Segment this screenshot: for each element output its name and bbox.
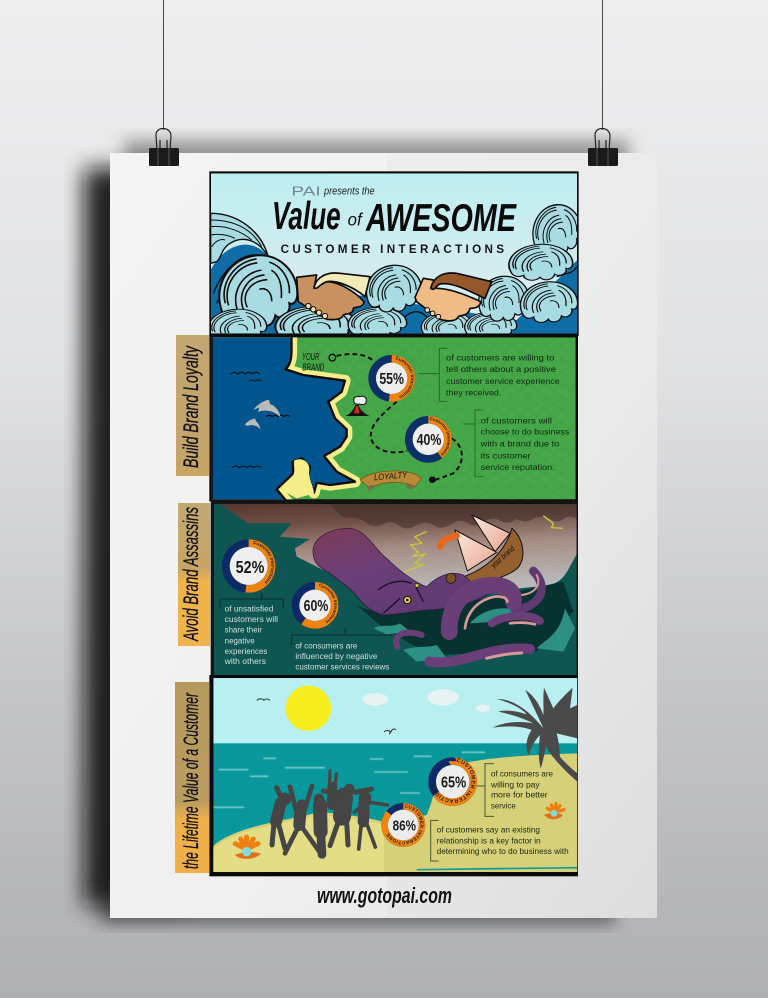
text: 40% stat: of customers will xyxy=(481,415,552,425)
label: your brand: BRAND xyxy=(302,363,324,374)
donut: 55%: Customer Interactions xyxy=(396,356,414,398)
text: 65% stat: service xyxy=(491,801,516,810)
icon: shell left xyxy=(235,837,261,859)
text: 52% stat: share their xyxy=(225,625,262,634)
text: 40% stat: with a brand due to xyxy=(480,438,560,448)
title: PAI presents the: presents the xyxy=(323,186,375,198)
poster drop shadow xyxy=(84,140,629,924)
palm tree xyxy=(493,688,577,782)
text: 52% stat: experiences xyxy=(225,647,267,656)
title: PAI presents the: PAI xyxy=(291,185,321,199)
text: 40% stat: its customer xyxy=(481,450,531,460)
donut: 40%: Customer Interactions xyxy=(430,417,450,456)
text: 55% stat: customer service experience xyxy=(446,376,560,386)
clouds xyxy=(362,689,490,712)
text: 52% stat: of unsatisfied xyxy=(225,604,273,613)
donut: 52%: Customer Interactions xyxy=(253,540,274,584)
donut: 55% xyxy=(368,355,415,402)
beach xyxy=(211,753,577,874)
footer url: www.gotopai.com xyxy=(317,883,452,908)
text: 60% stat xyxy=(292,628,392,672)
storm sky xyxy=(220,504,577,595)
people silhouettes xyxy=(272,771,387,854)
sea xyxy=(213,743,577,873)
text: 60% stat: influenced by negative xyxy=(295,652,378,661)
text: 55% stat: of customers are willing to xyxy=(446,352,555,362)
ribbon: Build Brand Loyalty: Build Brand Loyalty xyxy=(180,345,203,468)
birds xyxy=(257,699,396,734)
route: dashed path xyxy=(337,354,462,480)
text: 52% stat: customers will xyxy=(225,615,278,624)
waves: left group xyxy=(208,213,357,342)
text: 40% stat: service reputation. xyxy=(481,462,555,472)
donut: 40% xyxy=(405,416,452,463)
text: 86% stat: determining who to do business with xyxy=(437,847,569,856)
donut: 86%: 86% xyxy=(393,818,416,834)
sun xyxy=(286,686,331,731)
icon: handshake xyxy=(297,273,492,321)
donut: 65%: CUSTOMER INTERACTIONS xyxy=(430,758,476,804)
text: 40% stat: choose to do business xyxy=(481,427,570,437)
sky xyxy=(213,678,577,745)
poster sheet xyxy=(110,153,657,918)
title: Value of Awesome: AWESOME xyxy=(365,196,517,240)
ribbon: Avoid Brand Assassins: Avoid Brand Assassins xyxy=(180,507,203,642)
icon: route start and end xyxy=(329,354,436,483)
donut: 52%: 52% xyxy=(236,557,264,577)
dark waves xyxy=(357,582,575,662)
panel: avoid brand assassins xyxy=(210,500,578,675)
subtitle: CUSTOMER INTERACTIONS xyxy=(281,243,504,256)
text: 65% stat: of consumers are xyxy=(491,769,554,778)
text: 86% stat: of customers say an existing xyxy=(437,825,540,834)
text: 55% stat: they received. xyxy=(446,387,501,397)
boat: your brand xyxy=(489,544,517,570)
text: 86% stat: relationship is a key factor in xyxy=(437,836,541,845)
illustration: tentacles xyxy=(396,571,542,662)
donut: 65%: 65% xyxy=(441,775,466,792)
panel: lifetime value of a customer xyxy=(209,675,578,876)
banner: loyalty xyxy=(360,469,422,490)
icon: sea ripples xyxy=(231,372,290,468)
donut: 55%: 55% xyxy=(379,371,404,388)
map: sea and coastline xyxy=(212,333,355,503)
text: 86% stat xyxy=(431,820,569,861)
text: 55% stat xyxy=(418,348,560,401)
text: 60% stat: of consumers are xyxy=(295,642,358,651)
title: Value of Awesome: of xyxy=(348,209,364,229)
title: Value of Awesome: Value xyxy=(272,194,341,238)
label: your brand xyxy=(302,353,324,370)
panel: build brand loyalty xyxy=(209,335,578,502)
text: 52% stat: with others xyxy=(224,657,266,666)
label: your brand: YOUR xyxy=(302,352,319,363)
waves: centre group xyxy=(348,265,517,339)
text: 65% stat xyxy=(477,764,554,816)
donut: 60%: 60% xyxy=(304,598,329,615)
banner: loyalty: LOYALTY xyxy=(374,469,409,482)
donut: 60%: Customer Interactions xyxy=(319,584,338,624)
text: 60% stat: customer services reviews xyxy=(295,663,389,672)
binder clip right xyxy=(588,128,618,166)
binder clip left xyxy=(149,128,179,166)
text: 52% stat xyxy=(220,593,283,666)
text: 52% stat: negative xyxy=(225,636,255,645)
ribbon: Avoid Brand Assassins xyxy=(178,503,210,646)
hanging strings xyxy=(164,0,602,130)
icon: dolphins xyxy=(245,400,281,429)
illustration: orange tentacle xyxy=(440,536,457,547)
waves: deep water xyxy=(211,245,577,335)
donut: 52% xyxy=(222,539,276,593)
waves: right group xyxy=(479,205,582,322)
lightning xyxy=(397,516,563,575)
ribbon: Build Brand Loyalty xyxy=(176,335,209,476)
text: 55% stat: tell others about a positive xyxy=(446,364,556,374)
illustration: giant squid xyxy=(313,528,487,615)
text: 40% stat xyxy=(463,410,570,477)
text: 65% stat: willing to pay xyxy=(490,781,540,790)
title: PAI presents the xyxy=(291,185,375,199)
icon: volcano xyxy=(346,396,369,416)
text: 65% stat: more for better xyxy=(491,791,548,800)
icon: shell right xyxy=(544,804,564,819)
donut: 40%: 40% xyxy=(417,432,441,449)
donut: 60% xyxy=(292,582,338,629)
ribbon: the Lifetime Value of a Customer: the Lifetime Value of a Customer xyxy=(180,692,203,869)
panel: header xyxy=(208,171,582,342)
ribbon: the Lifetime Value of a Customer xyxy=(175,682,209,873)
sea foam xyxy=(213,752,485,807)
donut: 86%: CUSTOMER INTERACTIONS xyxy=(386,804,424,844)
boat xyxy=(453,515,523,585)
title: Value of Awesome xyxy=(272,194,517,240)
